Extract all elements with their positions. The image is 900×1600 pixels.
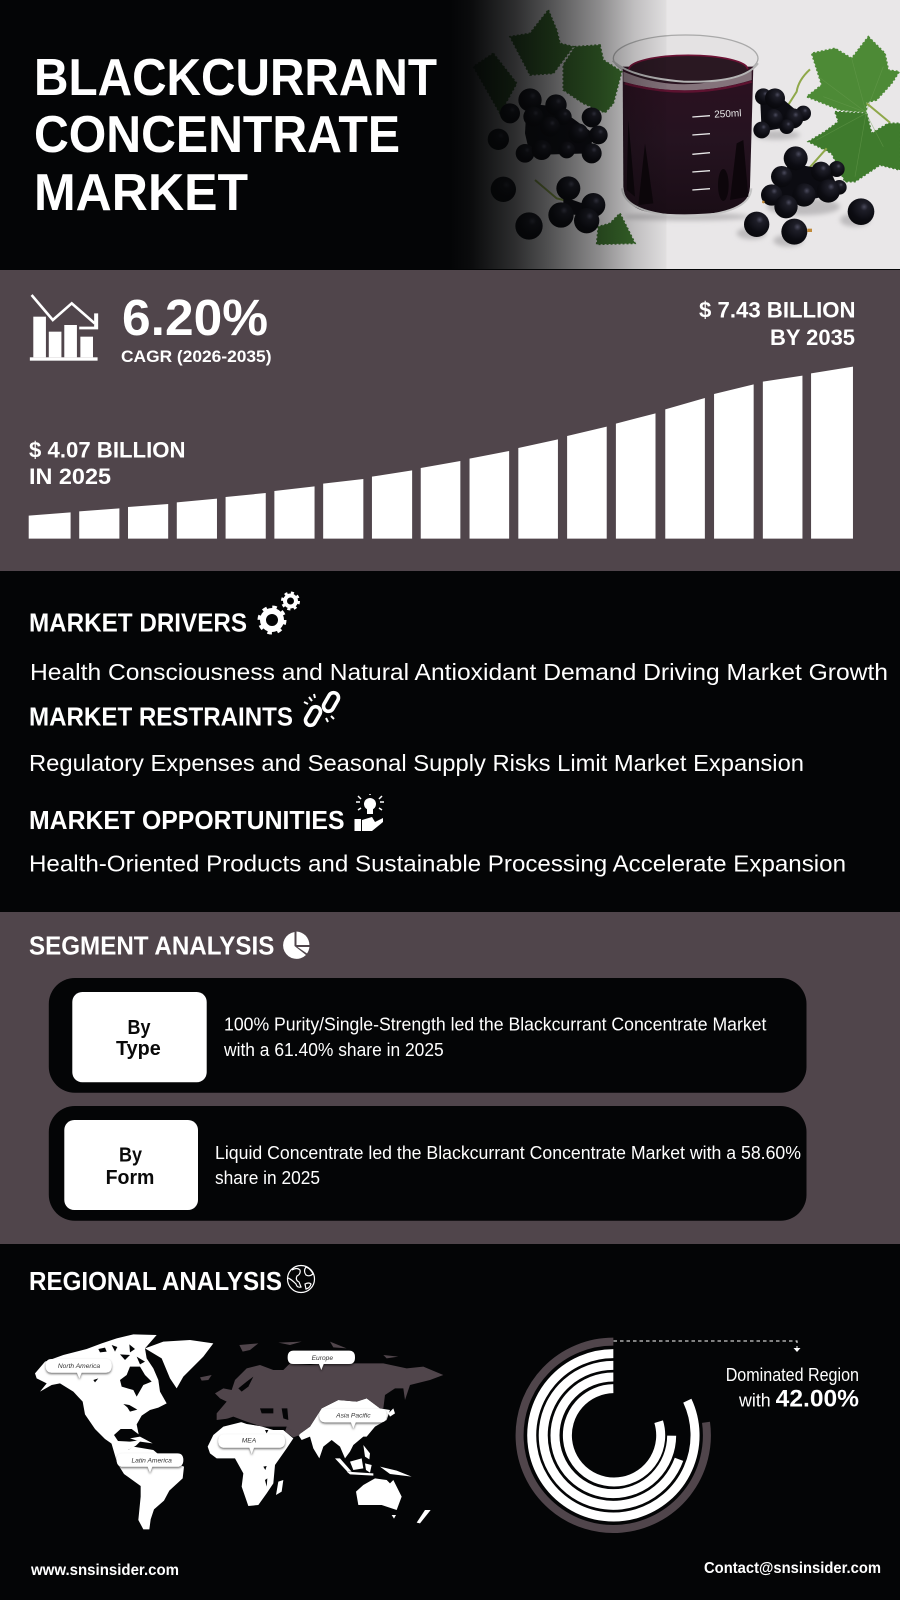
callout: Latin America: Latin America — [131, 1457, 172, 1464]
arrow: dashed leader to dominated region — [614, 1341, 800, 1352]
berries — [488, 88, 874, 245]
North America, mapped with zoom offset — [35, 1334, 213, 1450]
map: seas in Eurasia — [218, 1377, 288, 1426]
text: by type: with a 61.40% share in 2025 — [223, 1040, 444, 1060]
dominated region label: with — [738, 1391, 771, 1411]
text: by type: 100% Purity/Single-Strength led the Blackcurrant Concentrate Market — [224, 1015, 766, 1035]
CAGR value: 6.20% — [122, 289, 268, 346]
bar chart: market growth — [29, 367, 853, 539]
callout: MEA: MEA — [242, 1438, 257, 1445]
panel: segment analysis — [0, 912, 900, 1244]
end value label — [699, 298, 856, 350]
map: highlighted Eurasia — [200, 1342, 443, 1437]
icon: light bulb in hand — [354, 794, 384, 831]
callout: Europe: Europe — [312, 1355, 333, 1362]
start value label: $ 4.07 BILLION — [29, 438, 186, 463]
text: by form: share in 2025 — [215, 1168, 320, 1188]
panel: drivers, restraints, opportunities — [0, 571, 900, 912]
label box: by type: By — [128, 1017, 151, 1039]
contact email: Contact@snsinsider.com — [704, 1560, 881, 1577]
panel: regional analysis — [0, 1244, 900, 1600]
text: by form — [215, 1143, 801, 1188]
beaker — [612, 34, 759, 70]
callout: Latin America — [117, 1453, 183, 1473]
website: www.snsinsider.com — [30, 1562, 179, 1579]
heading: market restraints: MARKET RESTRAINTS — [29, 702, 293, 732]
map: inland water and arctic flecks — [93, 1344, 268, 1487]
radial chart — [520, 1342, 707, 1529]
header photo: beaker of juice, berries and leaves — [450, 0, 900, 269]
title: CONCENTRATE — [34, 106, 400, 164]
label box: by type — [72, 992, 207, 1082]
CAGR label: CAGR (2026-2035) — [121, 347, 272, 366]
callout: Asia Pacific — [319, 1409, 387, 1428]
text: restraint: Regulatory Expenses and Seasonal Supply Risks Limit Market Expansion — [29, 750, 804, 776]
end value label: BY 2035 — [770, 325, 855, 350]
berry cluster backing — [525, 95, 838, 217]
icon: broken chain — [304, 691, 340, 727]
title: BLACKCURRANT — [34, 49, 437, 107]
icon: gears — [260, 593, 298, 632]
title: MARKET — [34, 164, 248, 222]
title — [34, 49, 437, 222]
heading: segment analysis: SEGMENT ANALYSIS — [29, 930, 274, 960]
callout: MEA — [218, 1434, 285, 1454]
label box: by type: Type — [116, 1038, 161, 1060]
stems — [535, 69, 890, 210]
callout: North America — [46, 1359, 112, 1378]
ground shadows — [623, 130, 870, 247]
label box: by form: By — [119, 1145, 143, 1167]
header photo: beaker of juice, berries and leaves: 250ml — [714, 108, 742, 121]
map: white regions — [35, 1334, 431, 1529]
callout: Europe — [288, 1351, 355, 1370]
card: by form — [49, 1106, 807, 1221]
text: by type — [223, 1015, 766, 1060]
start value label — [29, 438, 186, 489]
heading: regional analysis: REGIONAL ANALYSIS — [29, 1266, 282, 1296]
heading: market opportunities: MARKET OPPORTUNITIES — [29, 805, 344, 835]
panel: market size — [0, 270, 900, 571]
heading: market drivers: MARKET DRIVERS — [29, 608, 247, 638]
start value label: IN 2025 — [29, 464, 111, 489]
leaves — [807, 37, 899, 112]
callout: North America: North America — [58, 1363, 100, 1370]
dominated region label — [726, 1365, 859, 1413]
South America, mapped with zoom offset — [110, 1438, 184, 1529]
dominated region label: 42.00% — [776, 1386, 859, 1413]
label box: by form — [64, 1120, 198, 1210]
Asia Pacific islands — [335, 1445, 431, 1523]
card: by type — [49, 978, 807, 1093]
world map — [35, 1334, 443, 1529]
icon: declining line over bar chart — [30, 295, 98, 361]
icon: pie chart — [283, 932, 309, 959]
text: opportunity: Health-Oriented Products and Sustainable Processing Accelerate Expansion — [29, 851, 846, 877]
text: driver: Health Consciousness and Natural Antioxidant Demand Driving Market Growth — [30, 659, 888, 685]
text: by form: Liquid Concentrate led the Blackcurrant Concentrate Market with a 58.60% — [215, 1143, 801, 1163]
callout: Asia Pacific: Asia Pacific — [335, 1413, 371, 1420]
header panel — [34, 0, 900, 269]
dominated region label: Dominated Region — [726, 1365, 859, 1385]
label box: by form: Form — [106, 1167, 154, 1189]
end value label: $ 7.43 BILLION — [699, 298, 856, 322]
icon: globe — [288, 1266, 314, 1292]
